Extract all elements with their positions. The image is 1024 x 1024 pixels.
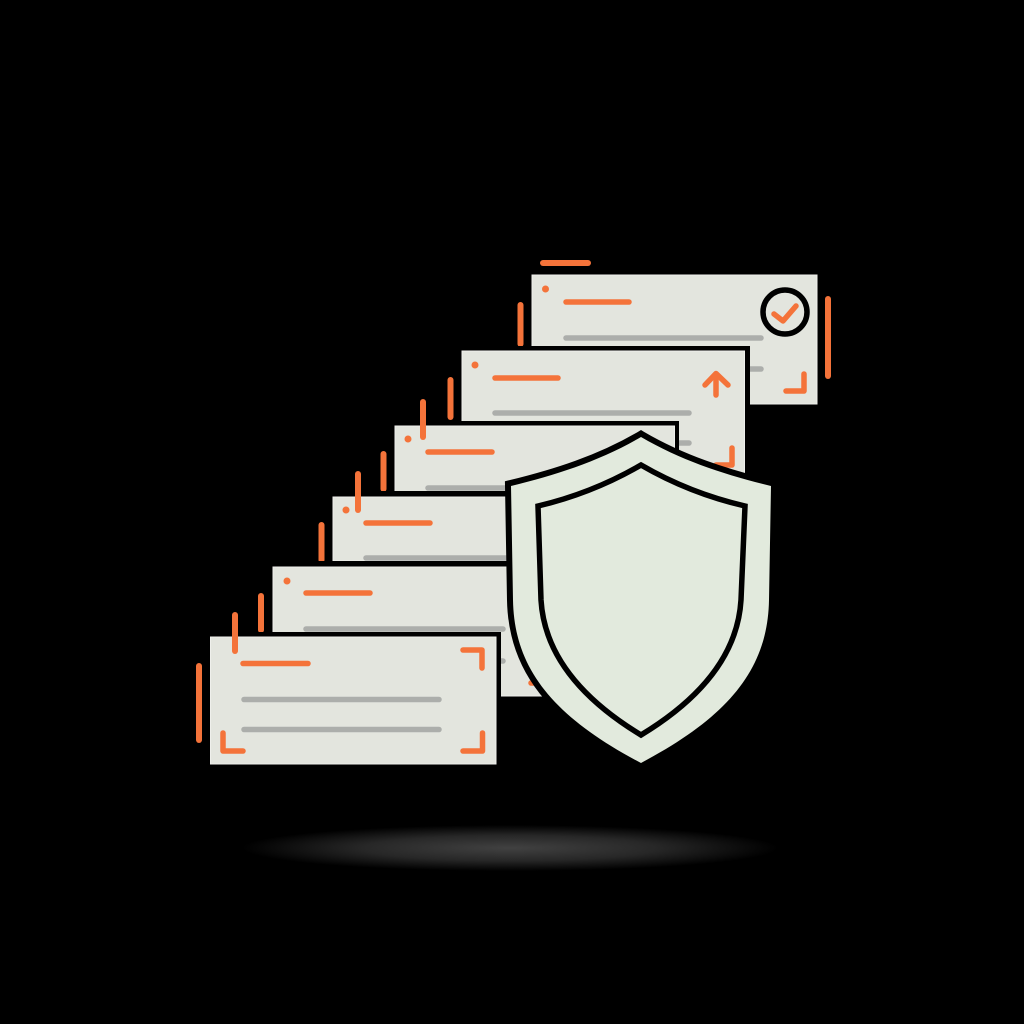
icon: check badge — [763, 290, 807, 334]
card 1: top card with check badge — [532, 275, 817, 404]
card 2 accent ticks — [448, 380, 454, 417]
ground shadow glow — [242, 825, 778, 871]
card 5 accent ticks — [258, 596, 264, 630]
card 2: card with up arrow — [462, 346, 750, 480]
corner brackets — [223, 650, 482, 751]
shield inner panel — [538, 465, 745, 735]
card 1 accent ticks — [520, 263, 828, 376]
card 4 accent ticks — [322, 474, 358, 560]
card 5 — [273, 561, 561, 697]
shield outer body — [511, 437, 771, 763]
card 6 accent ticks — [199, 615, 235, 740]
card 4 — [333, 491, 561, 567]
card 3 — [395, 421, 679, 496]
icon: up arrow — [705, 374, 728, 395]
card 3 accent ticks — [384, 402, 423, 489]
card 6: front card — [210, 632, 501, 765]
shield — [511, 437, 771, 763]
